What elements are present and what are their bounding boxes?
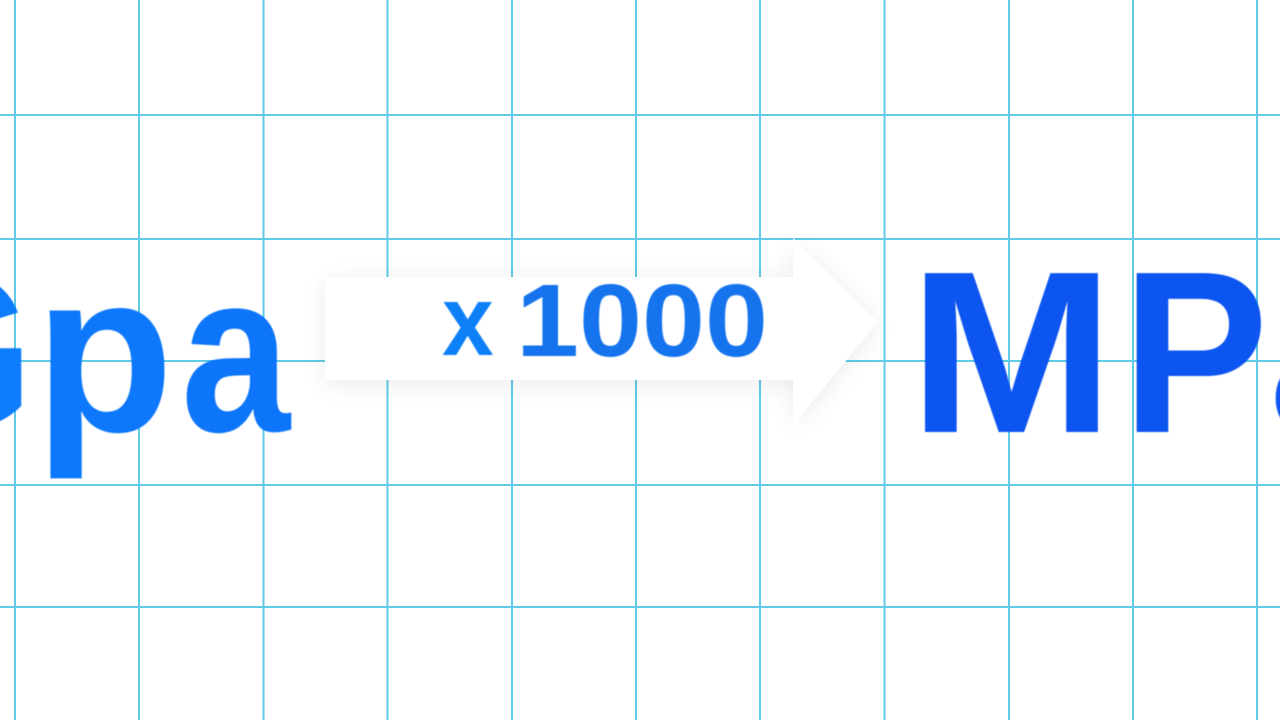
source unit label: Gpa: a xyxy=(181,226,292,480)
target unit label: MPa: P xyxy=(1122,223,1268,481)
multiplier label: x 1000: 1000 xyxy=(516,263,768,378)
target unit label: MPa xyxy=(908,222,1280,481)
target unit label: MPa: M xyxy=(908,222,1114,481)
source unit label: Gpa: p xyxy=(34,226,174,480)
arrow: conversion factor xyxy=(325,238,878,429)
source unit label: Gpa xyxy=(0,226,292,480)
multiplier label: x 1000: x xyxy=(442,266,494,377)
